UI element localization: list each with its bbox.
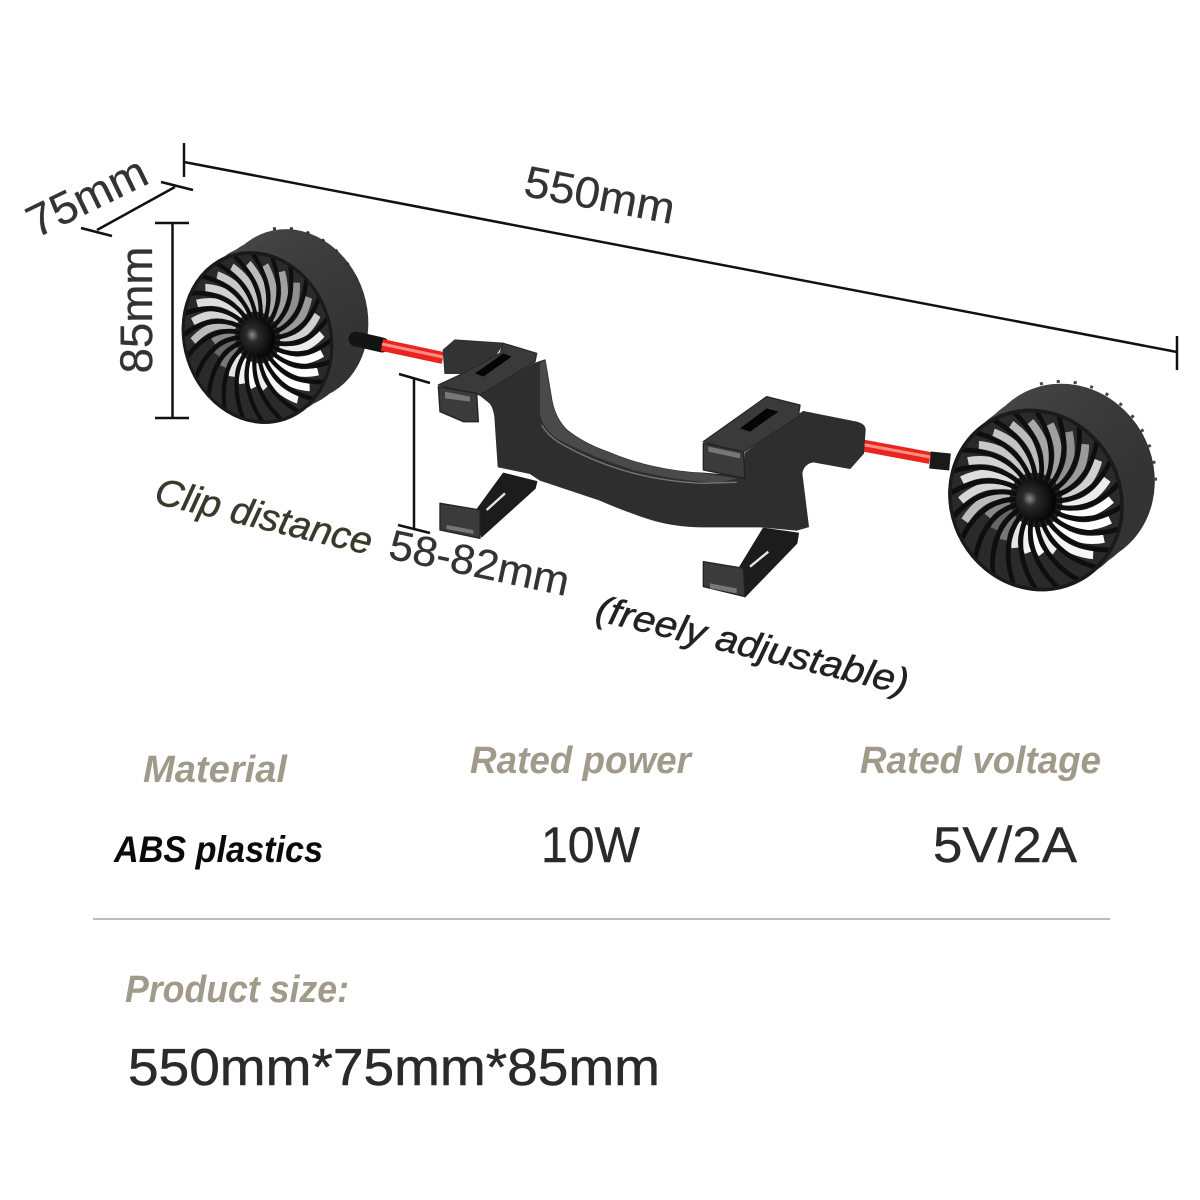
label: clip distance: (freely adjustable) <box>592 588 913 702</box>
icon: double clip bracket <box>438 340 865 597</box>
spec: rated voltage <box>860 740 1101 873</box>
spec: material: Material <box>143 749 288 791</box>
bracket body <box>480 360 865 530</box>
lower right clip <box>740 528 798 597</box>
dimension: clip distance bracket <box>398 374 430 533</box>
spec: material: ABS plastics <box>113 829 323 870</box>
spec: rated power <box>470 740 693 873</box>
spec: product size: Product size: <box>125 969 349 1011</box>
dimension: height 85mm: 85mm <box>111 246 162 374</box>
spec: product size: 550mm*75mm*85mm <box>128 1039 660 1097</box>
lower left clip <box>477 473 537 537</box>
spec: rated power: Rated power <box>470 740 693 782</box>
spec: rated power: 10W <box>541 817 641 873</box>
spec: rated voltage: 5V/2A <box>933 817 1078 873</box>
upper left clip back arm <box>443 340 503 373</box>
dimension: overall length 550mm <box>184 143 1177 370</box>
icon: left fan <box>160 209 443 444</box>
spec: material <box>113 749 323 870</box>
spec: product size <box>125 969 660 1097</box>
label: clip distance <box>151 471 913 702</box>
label: clip distance: Clip distance <box>151 471 377 564</box>
icon: right fan <box>860 351 1188 624</box>
upper left clip <box>438 343 537 395</box>
dimension: depth 75mm: 75mm <box>18 146 155 248</box>
upper right clip <box>703 397 800 453</box>
label: clip distance: 58-82mm <box>385 521 574 605</box>
dimension: overall length 550mm: 550mm <box>520 157 679 234</box>
spec: rated voltage: Rated voltage <box>860 740 1101 782</box>
